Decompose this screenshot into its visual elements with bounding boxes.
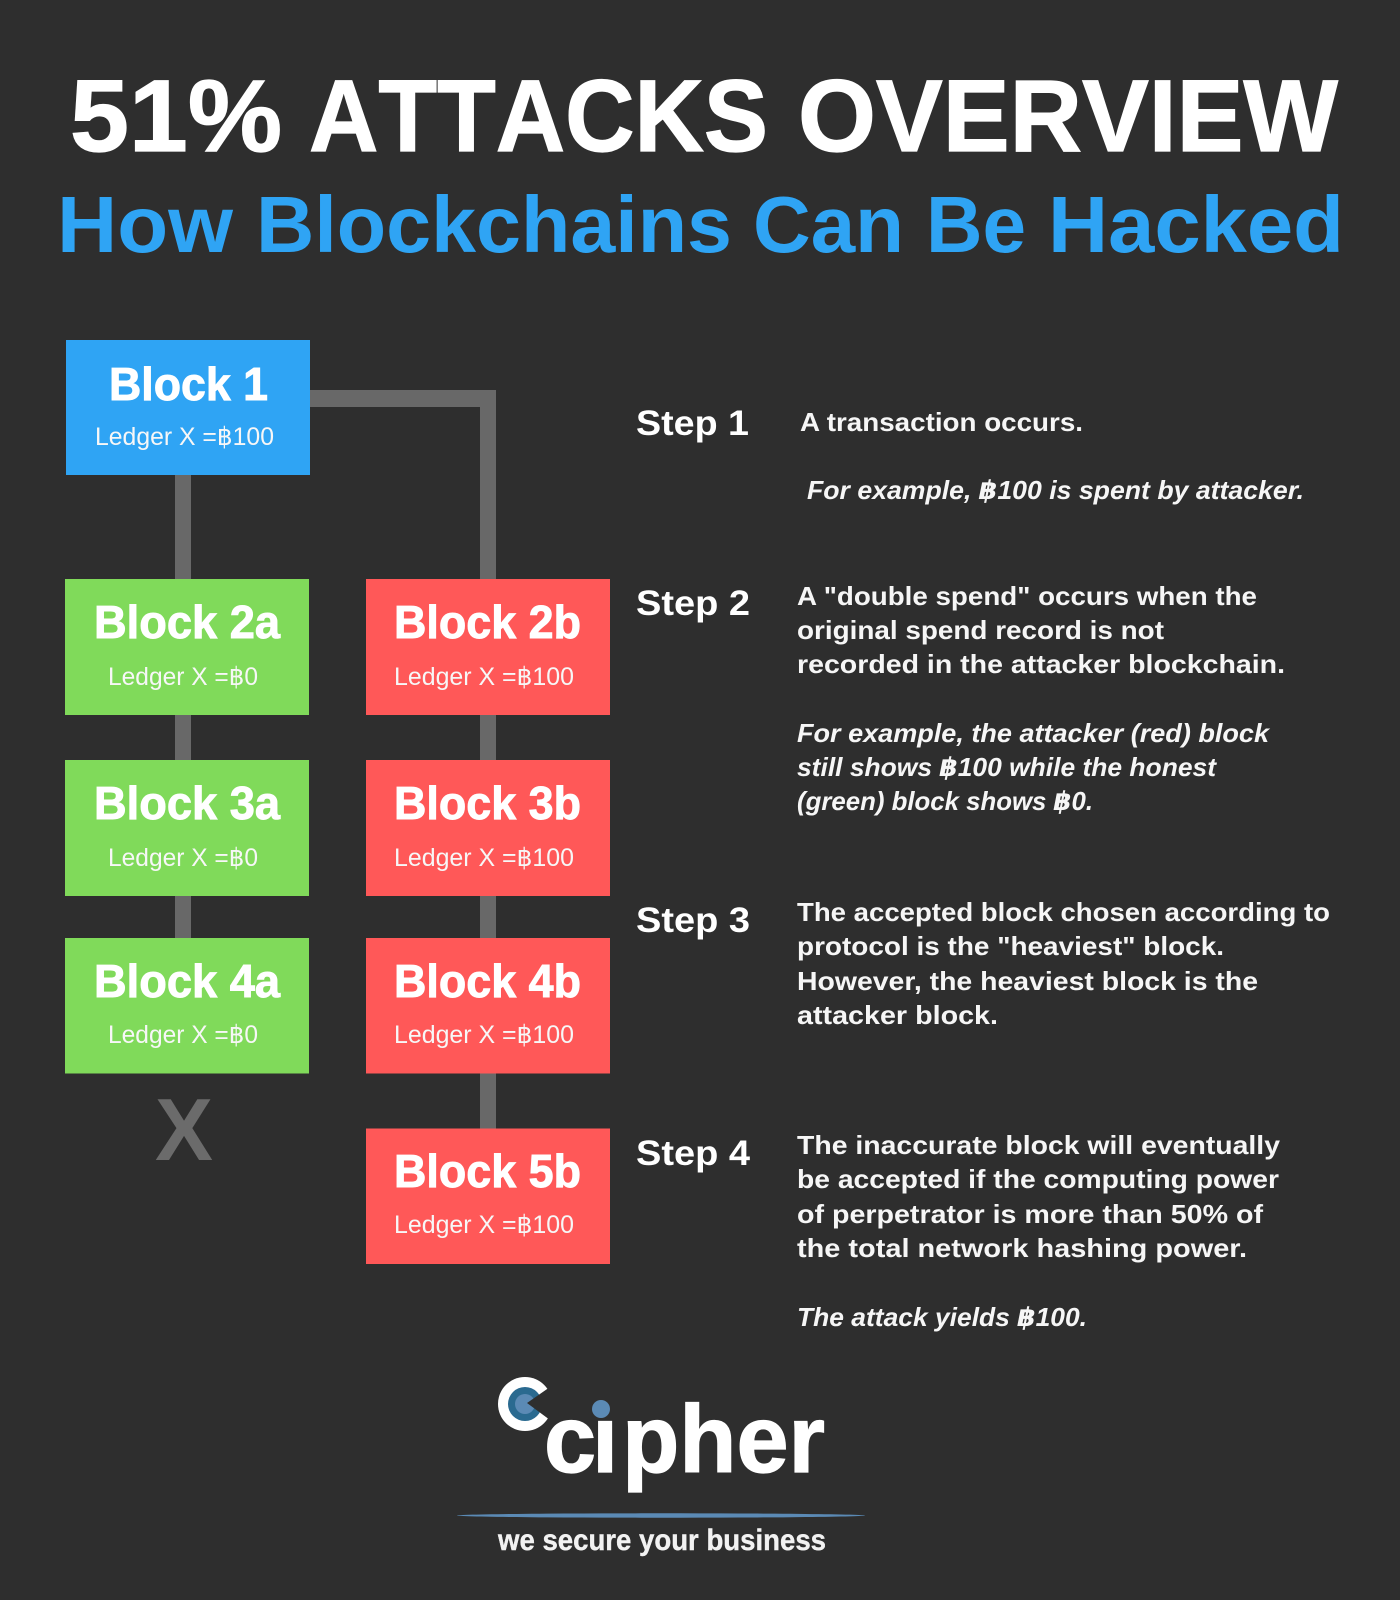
chain connectors	[175, 390, 496, 1135]
tagline: we secure your business	[497, 1524, 826, 1557]
block 2b: Block 2b	[394, 596, 581, 648]
step 4: The attack yields ฿100.	[797, 1302, 1087, 1332]
step 2: A "double spend" occurs when the	[797, 581, 1257, 611]
block 4b	[366, 938, 610, 1074]
block 2a: Block 2a	[94, 596, 280, 648]
step 4: of perpetrator is more than 50% of	[797, 1199, 1263, 1229]
block 3a	[65, 760, 309, 896]
block 4a	[65, 938, 309, 1074]
block 3b: Ledger X =฿100	[394, 844, 574, 872]
block 5b	[366, 1128, 610, 1264]
step 2: For example, the attacker (red) block	[797, 718, 1271, 748]
step 3: Step 3	[636, 901, 750, 940]
subtitle	[57, 180, 1344, 269]
step 3: However, the heaviest block is the	[797, 966, 1258, 996]
step 3	[636, 897, 1330, 1030]
subtitle: Be	[926, 180, 1026, 269]
rejected chain X mark: X	[155, 1080, 213, 1179]
step 4: be accepted if the computing power	[797, 1164, 1279, 1194]
step 2: original spend record is not	[797, 615, 1164, 645]
block 1: Block 1	[109, 358, 268, 410]
block 3b	[366, 760, 610, 896]
block 2b: Ledger X =฿100	[394, 663, 574, 691]
block 4b: Block 4b	[394, 955, 581, 1007]
block 3a: Ledger X =฿0	[108, 844, 258, 872]
block 2a: Ledger X =฿0	[108, 663, 258, 691]
step 2: recorded in the attacker blockchain.	[797, 649, 1285, 679]
block 1	[66, 340, 310, 475]
step 2: (green) block shows ฿0.	[797, 786, 1093, 816]
block 5b: Ledger X =฿100	[394, 1211, 574, 1239]
step 4	[636, 1130, 1281, 1332]
step 3: protocol is the "heaviest" block.	[797, 931, 1224, 961]
subtitle: How	[57, 180, 234, 269]
block 4b: Ledger X =฿100	[394, 1021, 574, 1049]
subtitle: Hacked	[1048, 180, 1344, 269]
step 1: A transaction occurs.	[800, 407, 1083, 437]
step 4: Step 4	[636, 1134, 751, 1173]
block 5b: Block 5b	[394, 1145, 581, 1197]
subtitle: Can	[753, 180, 904, 269]
step 2: still shows ฿100 while the honest	[797, 752, 1217, 782]
logo wordmark: cipher	[544, 1386, 825, 1493]
step 3: attacker block.	[797, 1000, 998, 1030]
block 2a	[65, 579, 309, 715]
title: ATTACKS	[309, 59, 768, 173]
block 4a: Ledger X =฿0	[108, 1021, 258, 1049]
step 1: For example, ฿100 is spent by attacker.	[807, 475, 1304, 505]
logo mark	[498, 1377, 556, 1431]
block 4a: Block 4a	[94, 955, 280, 1007]
step 2: Step 2	[636, 584, 750, 623]
subtitle: Blockchains	[256, 180, 732, 269]
block 3a: Block 3a	[94, 777, 280, 829]
step 4: The inaccurate block will eventually	[797, 1130, 1281, 1160]
step 3: The accepted block chosen according to	[797, 897, 1330, 927]
step 1	[636, 404, 1304, 505]
step 4: the total network hashing power.	[797, 1233, 1247, 1263]
block 1: Ledger X =฿100	[95, 423, 274, 451]
title	[70, 59, 1339, 173]
logo underline	[457, 1513, 865, 1518]
cipher logo	[457, 1377, 865, 1557]
step 2	[636, 581, 1285, 816]
block 3b: Block 3b	[394, 777, 581, 829]
step 1: Step 1	[636, 404, 749, 443]
title: 51%	[70, 59, 282, 173]
title: OVERVIEW	[798, 59, 1339, 173]
block 2b	[366, 579, 610, 715]
